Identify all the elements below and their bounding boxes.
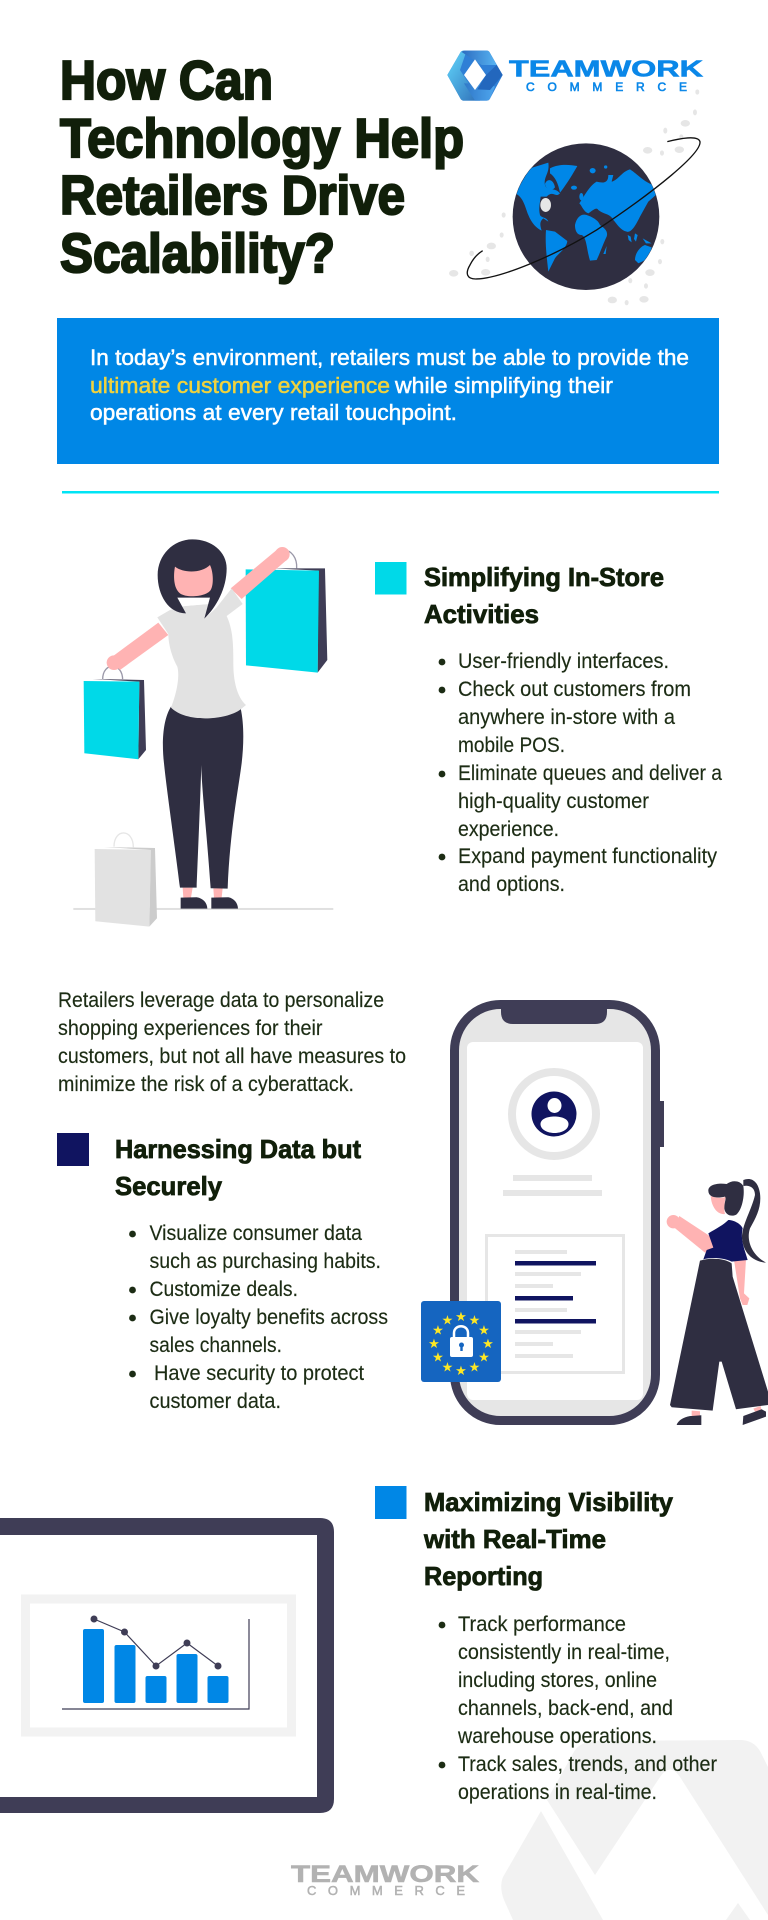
bullet list: Check out customers from — [458, 678, 691, 701]
document card — [486, 1236, 624, 1372]
background watermark — [501, 1740, 768, 1920]
bullet list: including stores, online — [458, 1669, 657, 1692]
heading: with Real-Time — [423, 1524, 606, 1554]
bar chart — [62, 1616, 249, 1709]
figure — [107, 539, 290, 909]
footer logo — [291, 1861, 480, 1898]
title: How Can — [60, 49, 273, 111]
panel: intro callout: while simplifying their — [394, 373, 614, 398]
panel: intro callout: operations at every retail touchpoint. — [90, 400, 457, 425]
bullet list: Track sales, trends, and other — [458, 1753, 717, 1776]
screen — [467, 1042, 643, 1400]
text block: data intro: Retailers leverage data to personalize — [58, 989, 384, 1012]
heading — [423, 1487, 674, 1591]
bullet list: Customize deals. — [150, 1278, 298, 1301]
icon: profile avatar — [512, 1072, 596, 1156]
bullet list: experience. — [458, 818, 559, 841]
icon: EU security badge: ★ — [482, 1336, 494, 1351]
monitor bezel — [0, 1518, 334, 1813]
heading: Harnessing Data but — [115, 1134, 361, 1164]
bullet list: high-quality customer — [458, 790, 649, 813]
chart frame — [26, 1599, 292, 1732]
bullet list: Eliminate queues and deliver a — [458, 762, 722, 785]
bullet list — [439, 1613, 717, 1804]
logo: Teamwork Commerce — [447, 51, 704, 101]
icon: EU security badge: ★ — [469, 1360, 480, 1374]
floor line — [73, 908, 333, 910]
icon: EU security badge: ★ — [432, 1350, 444, 1364]
footer logo: TEAMWORK — [291, 1861, 480, 1888]
bullet list: Expand payment functionality — [458, 845, 717, 868]
bullet list: anywhere in-store with a — [458, 706, 675, 729]
bullet list: Visualize consumer data — [150, 1222, 362, 1245]
title: Retailers Drive — [60, 164, 405, 226]
notch — [501, 1005, 607, 1024]
illustration: woman pointing at phone — [667, 1179, 768, 1425]
icon: EU security badge: ★ — [432, 1322, 444, 1338]
icon: logo ribbon — [447, 51, 503, 101]
text block: data intro: shopping experiences for their — [58, 1017, 322, 1040]
bullet list: channels, back-end, and — [458, 1697, 673, 1720]
title — [60, 49, 464, 284]
bullet list — [129, 1222, 388, 1413]
title: Scalability? — [60, 222, 335, 284]
bullet list: Have security to protect — [154, 1362, 364, 1385]
panel: intro callout: ultimate customer experience — [90, 373, 390, 398]
bullet list: consistently in real-time, — [458, 1641, 670, 1664]
bullet list: such as purchasing habits. — [150, 1250, 381, 1273]
side button — [658, 1101, 664, 1147]
grey bag — [95, 833, 157, 927]
panel: intro callout — [57, 318, 719, 464]
wordmark: COMMERCE — [526, 80, 687, 94]
bullet list: Track performance — [458, 1613, 626, 1636]
panel: intro callout: In today’s environment, retailers must be able to provide the — [90, 345, 689, 370]
icon: EU security badge: ★ — [469, 1312, 480, 1328]
wordmark — [509, 56, 704, 94]
marker: blue square — [375, 1486, 406, 1519]
small bag — [84, 666, 146, 759]
heading: Maximizing Visibility — [424, 1487, 674, 1517]
icon: EU security badge: ★ — [455, 1363, 467, 1378]
icon: EU security badge: ★ — [455, 1309, 467, 1324]
title: Technology Help — [60, 107, 464, 169]
section: harnessing data but securely — [57, 1133, 388, 1413]
bullet list: Give loyalty benefits across — [150, 1306, 388, 1329]
icon: EU security badge: ★ — [478, 1350, 490, 1364]
bullet list: customer data. — [150, 1390, 281, 1413]
icon: EU security badge: ★ — [442, 1360, 453, 1374]
bullet list: warehouse operations. — [457, 1725, 657, 1748]
icon: globe with orbit — [449, 89, 700, 305]
text block: data intro — [58, 989, 406, 1096]
heading: Reporting — [424, 1561, 543, 1591]
icon: EU security badge: ★ — [428, 1336, 440, 1351]
heading: Simplifying In-Store — [424, 562, 664, 592]
heading: Activities — [424, 599, 539, 629]
marker: navy square — [57, 1133, 89, 1166]
illustration: monitor with bar chart — [0, 1518, 334, 1813]
section: simplifying in-store activities — [375, 562, 722, 896]
footer logo: COMMERCE — [307, 1883, 465, 1898]
phone body — [454, 1004, 656, 1420]
bullet list: and options. — [458, 873, 565, 896]
marker: cyan square — [375, 562, 406, 594]
icon: EU security badge: ★ — [442, 1312, 453, 1328]
icon: EU security badge — [421, 1301, 501, 1382]
heading: Securely — [115, 1171, 223, 1201]
illustration: phone with profile screen — [421, 1004, 664, 1420]
section: maximizing visibility with real-time reporting — [375, 1486, 717, 1804]
heading — [424, 562, 664, 629]
heading — [115, 1134, 361, 1201]
large bag — [246, 550, 327, 673]
bullet list: mobile POS. — [458, 734, 565, 757]
bullet list — [439, 650, 722, 896]
illustration: woman with shopping bags — [73, 539, 333, 927]
text block: data intro: minimize the risk of a cyberattack. — [58, 1073, 354, 1096]
bullet list: operations in real-time. — [458, 1781, 657, 1804]
bullet list: sales channels. — [150, 1334, 282, 1357]
trend line — [90, 1616, 222, 1670]
icon: EU security badge: ★ — [478, 1322, 490, 1338]
text block: data intro: customers, but not all have measures to — [58, 1045, 406, 1068]
bullet list: User-friendly interfaces. — [458, 650, 669, 673]
wordmark: TEAMWORK — [509, 56, 704, 82]
